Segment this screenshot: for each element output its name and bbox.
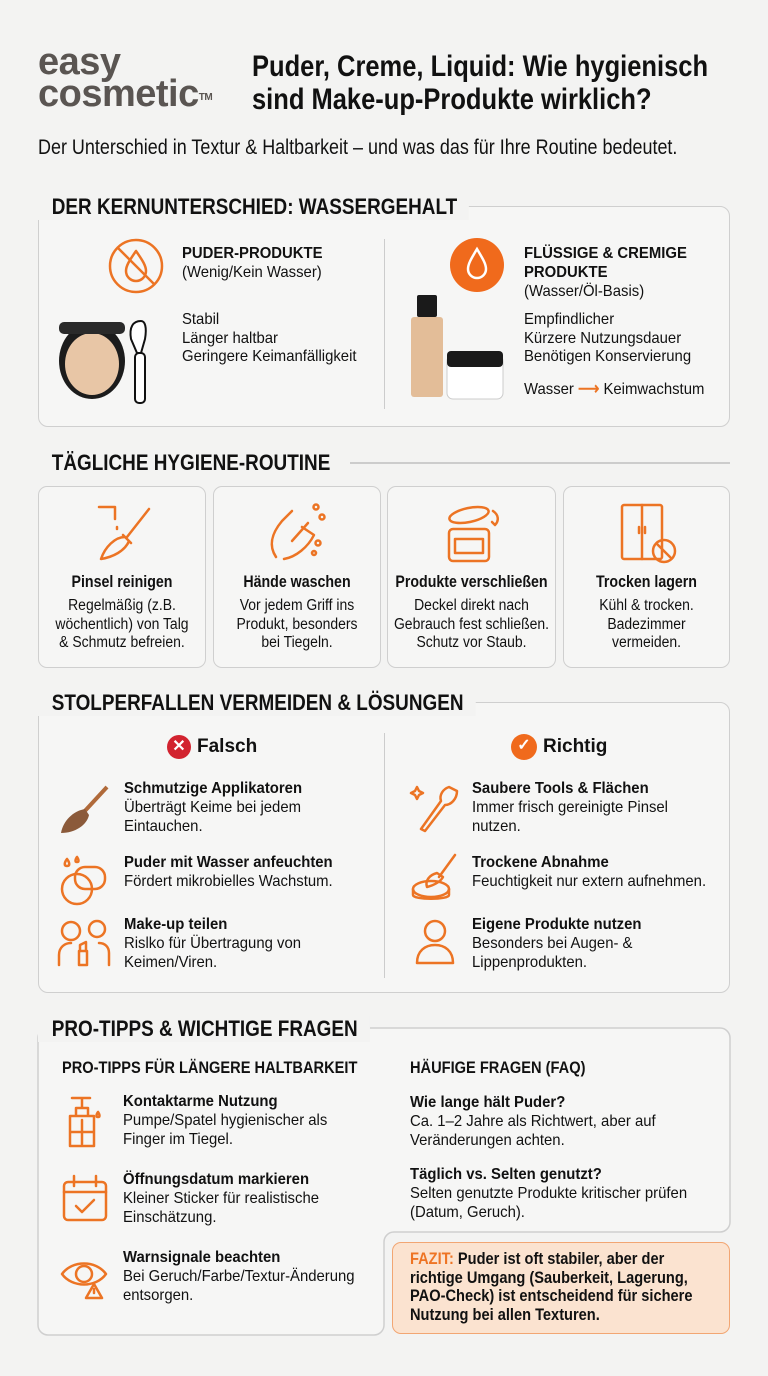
card: Produkte verschließen: [387, 486, 556, 668]
logo: [38, 41, 212, 115]
faq: Täglich vs selten: Täglich vs. Selten genutzt?: [410, 1166, 602, 1183]
title: sind Make-up-Produkte wirklich?: [252, 83, 652, 116]
tip: Warnsignale: entsorgen.: [123, 1287, 193, 1304]
card: Produkte verschließen: Produkte verschließen: [395, 573, 548, 591]
heading: Richtig: ✓: [517, 737, 531, 754]
card: Trocken lagern: Badezimmer: [607, 616, 686, 632]
text: fluessig: [524, 244, 687, 300]
list: puder: [182, 311, 357, 365]
card: Pinsel reinigen: & Schmutz befreien.: [59, 634, 185, 651]
list: fluessig: Benötigen Konservierung: [524, 348, 691, 365]
text: fluessig: PRODUKTE: [524, 264, 607, 281]
faq: Täglich vs selten: (Datum, Geruch).: [410, 1204, 525, 1221]
heading: Tägliche Hygiene-Routine: TÄGLICHE HYGIENE-ROUTINE: [52, 450, 330, 475]
item: Schmutzige Applikatoren: Eintauchen.: [124, 818, 203, 835]
text: puder: (Wenig/Kein Wasser): [182, 264, 322, 281]
icon: hands: [270, 503, 326, 560]
icon: jar: [448, 506, 499, 562]
card: Hände waschen: bei Tiegeln.: [261, 634, 333, 651]
heading: Kernunterschied: DER KERNUNTERSCHIED: WASSERGEHALT: [52, 194, 457, 219]
subtitle: Der Unterschied in Textur & Haltbarkeit – und was das für Ihre Routine bedeutet.: [38, 136, 677, 159]
tip: Öffnungsdatum: Einschätzung.: [123, 1209, 216, 1226]
card: Hände waschen: [213, 486, 381, 668]
item: Make-up teilen: Keimen/Viren.: [124, 954, 217, 971]
card: Trocken lagern: Kühl & trocken.: [599, 597, 694, 614]
tip: Öffnungsdatum: Kleiner Sticker für realistische: [123, 1190, 319, 1207]
item: Make-up teilen: Make-up teilen: [124, 916, 227, 933]
list: fluessig: [524, 311, 691, 365]
item: Schmutzige Applikatoren: Überträgt Keime bei jedem: [124, 799, 301, 816]
text: puder: [182, 245, 323, 281]
heading: Falsch: [167, 735, 257, 759]
card: Trocken lagern: Trocken lagern: [596, 573, 697, 591]
item: Trockene Abnahme: [412, 854, 706, 900]
faq: Puder: [410, 1094, 656, 1149]
item: Trockene Abnahme: Trockene Abnahme: [472, 854, 609, 871]
heading: Richtig: Richtig: [543, 736, 607, 757]
callout: Fazit: FAZIT: Puder ist oft stabiler, aber der: [410, 1249, 664, 1268]
card: Pinsel reinigen: wöchentlich) von Talg: [55, 616, 189, 632]
list: puder: Länger haltbar: [182, 330, 278, 346]
item: Trockene Abnahme: Feuchtigkeit nur extern aufnehmen.: [472, 873, 706, 890]
icon: brush tap: [98, 506, 150, 560]
heading: Falsch: ✕: [172, 738, 186, 755]
item: Eigene Produkte: [416, 916, 641, 971]
heading: Richtig: [511, 734, 607, 760]
item: Puder mit Wasser: Puder mit Wasser anfeuchten: [124, 854, 333, 871]
faq: Puder: Wie lange hält Puder?: [410, 1094, 565, 1111]
divider: [384, 239, 385, 409]
faq: Puder: Veränderungen achten.: [410, 1132, 565, 1149]
card: Pinsel reinigen: Pinsel reinigen: [72, 573, 172, 591]
card: Hände waschen: Vor jedem Griff ins: [240, 597, 354, 614]
tip: Öffnungsdatum: [62, 1170, 319, 1226]
item: Puder mit Wasser: [60, 854, 333, 906]
card: Hände waschen: Hände waschen: [243, 573, 351, 591]
tip: Warnsignale: Warnsignale beachten: [123, 1249, 280, 1266]
arrow: Wasser to Keimwachstum: Wasser ⟶ Keimwachstum: [524, 381, 704, 398]
icon: bottle & jar: [411, 295, 504, 400]
card: Pinsel reinigen: Regelmäßig (z.B.: [68, 597, 176, 614]
item: Eigene Produkte: Lippenprodukten.: [472, 954, 587, 971]
text: fluessig: (Wasser/Öl-Basis): [524, 283, 644, 300]
title: Puder, Creme, Liquid: Wie hygienisch: [252, 50, 708, 83]
text: fluessig: FLÜSSIGE & CREMIGE: [524, 245, 687, 262]
item: Schmutzige Applikatoren: [61, 780, 302, 835]
tip: Warnsignale: Bei Geruch/Farbe/Textur-Änderung: [123, 1268, 355, 1285]
tip: Warnsignale: [60, 1249, 355, 1304]
logo: easy: [38, 41, 121, 83]
item: Eigene Produkte: Eigene Produkte nutzen: [472, 916, 641, 933]
faq: Täglich vs selten: [410, 1166, 687, 1221]
item: Saubere Tools: Saubere Tools & Flächen: [472, 780, 649, 797]
tip: Öffnungsdatum: Öffnungsdatum markieren: [123, 1171, 309, 1188]
item: Saubere Tools: Immer frisch gereinigte Pinsel: [472, 799, 668, 816]
list: puder: Stabil: [182, 311, 219, 328]
card: Produkte verschließen: Schutz vor Staub.: [416, 634, 527, 651]
icon: water drop: [450, 238, 504, 292]
tip: Kontaktarme Nutzung: [68, 1093, 327, 1148]
heading: Falsch: Falsch: [197, 736, 257, 757]
list: fluessig: Kürzere Nutzungsdauer: [524, 330, 681, 346]
icon: cabinet: [620, 504, 676, 564]
item: Saubere Tools: nutzen.: [472, 818, 521, 835]
icon: no water: [108, 238, 164, 294]
item: Make-up teilen: Rislko für Übertragung von: [124, 935, 301, 952]
card: Produkte verschließen: Deckel direkt nach: [414, 597, 529, 614]
heading: Pro-Tipps: PRO-TIPPS & WICHTIGE FRAGEN: [52, 1016, 358, 1041]
title: [252, 50, 708, 116]
tip: Kontaktarme Nutzung: Pumpe/Spatel hygienischer als: [123, 1112, 327, 1129]
card: Trocken lagern: vermeiden.: [612, 634, 681, 651]
faq: Puder: Ca. 1–2 Jahre als Richtwert, aber auf: [410, 1113, 656, 1130]
tip: Kontaktarme Nutzung: Finger im Tiegel.: [123, 1131, 233, 1148]
callout: Fazit: Nutzung bei allen Texturen.: [410, 1304, 600, 1324]
card: Produkte verschließen: Gebrauch fest schließen.: [394, 616, 549, 632]
item: Eigene Produkte: Besonders bei Augen- &: [472, 935, 632, 952]
logo: cosmeticTM: [38, 73, 212, 115]
callout: Fazit: [392, 1242, 730, 1334]
icon: compact & brush: [59, 320, 147, 404]
callout: Fazit: richtige Umgang (Sauberkeit, Lagerung,: [410, 1268, 688, 1286]
panel: Pro-Tipps outline: [37, 1027, 731, 1336]
list: puder: Geringere Keimanfälligkeit: [182, 348, 357, 365]
tip: Kontaktarme Nutzung: Kontaktarme Nutzung: [123, 1093, 278, 1110]
item: Saubere Tools: [410, 780, 668, 835]
text: puder: PUDER-PRODUKTE: [182, 245, 323, 262]
panel: Stolperfallen: [38, 702, 730, 993]
item: Puder mit Wasser: Fördert mikrobielles Wachstum.: [124, 873, 333, 890]
card: Trocken lagern: [563, 486, 730, 668]
card: Hände waschen: Produkt, besonders: [237, 616, 357, 632]
subheading: FAQ: HÄUFIGE FRAGEN (FAQ): [410, 1058, 585, 1077]
list: fluessig: Empfindlicher: [524, 311, 614, 328]
faq: Täglich vs selten: Selten genutzte Produkte kritischer prüfen: [410, 1185, 687, 1202]
heading: Stolperfallen: STOLPERFALLEN VERMEIDEN & LÖSUNGEN: [52, 690, 463, 715]
subheading: Pro-Tipps Haltbarkeit: PRO-TIPPS FÜR LÄNGERE HALTBARKEIT: [62, 1058, 357, 1077]
card: Pinsel reinigen: [38, 486, 206, 668]
callout: Fazit: PAO-Check) ist entscheidend für sichere: [410, 1286, 692, 1305]
panel: Kernunterschied: [38, 206, 730, 427]
divider: [384, 733, 385, 978]
item: Schmutzige Applikatoren: Schmutzige Applikatoren: [124, 780, 302, 797]
item: Make-up teilen: [58, 916, 301, 971]
